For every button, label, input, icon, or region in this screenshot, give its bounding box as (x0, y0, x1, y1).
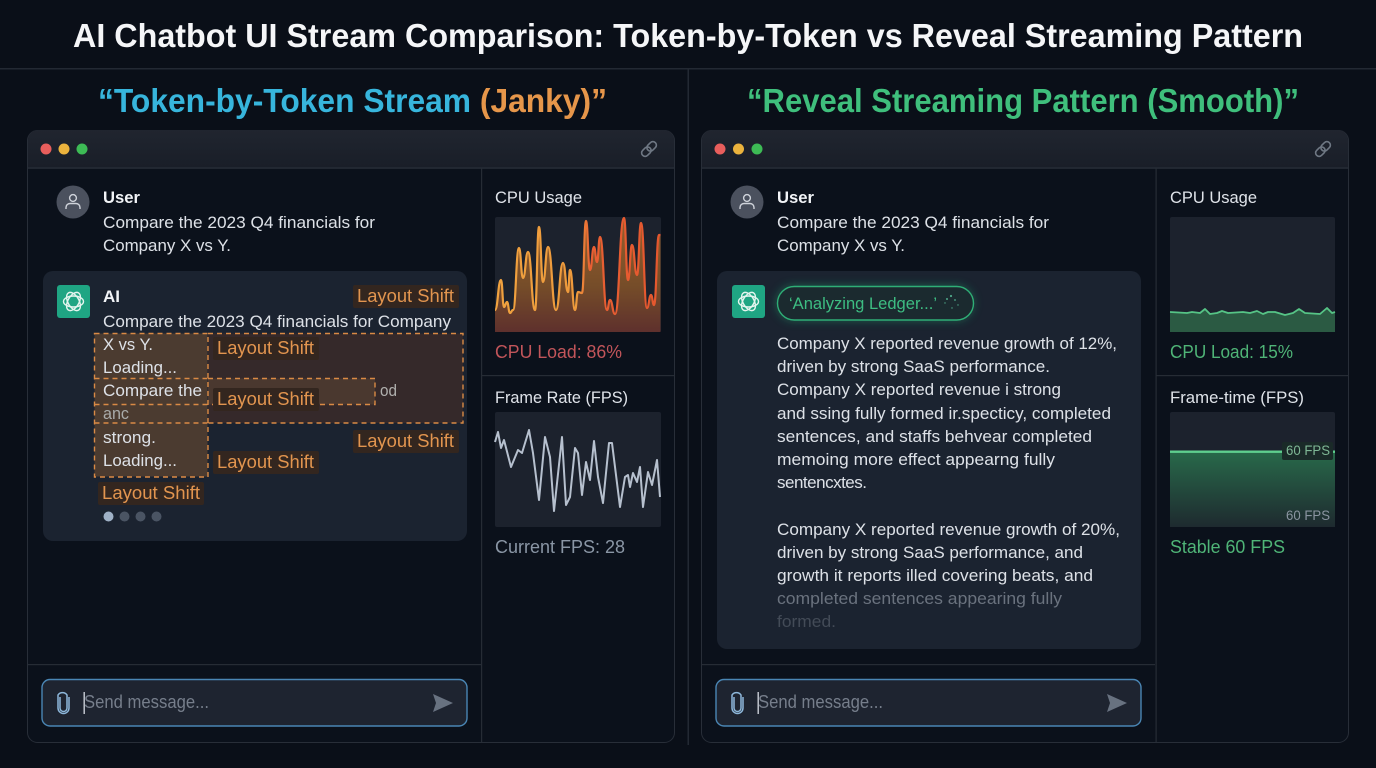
label: layout shift: Layout Shift (217, 338, 314, 358)
response paragraph one: Company X reported revenue growth of 12%, (777, 334, 1117, 353)
response paragraph two (777, 520, 1120, 631)
response paragraph one: memoing more effect appearng fully (777, 450, 1056, 469)
chart: CPU usage janky (495, 188, 661, 362)
heading: reveal streaming pattern: “Reveal Streaming Pattern (Smooth)” (747, 82, 1299, 119)
icon: user avatar (730, 186, 764, 218)
panel: AI message with layout shifts: AI (103, 287, 120, 306)
chart: frame rate janky (495, 388, 661, 557)
icon: send arrow (1107, 694, 1127, 712)
icon: link (640, 140, 658, 158)
response paragraph two: formed. (777, 612, 836, 631)
status pill: analyzing ledger: ‘Analyzing Ledger...’ (789, 294, 937, 313)
user message (730, 186, 1049, 255)
response paragraph one: driven by strong SaaS performance. (777, 357, 1050, 376)
panel: smooth window (702, 130, 1348, 742)
response paragraph two: growth it reports illed covering beats, and (777, 566, 1093, 585)
layout shift regions (94, 334, 463, 477)
label: layout shift: Layout Shift (217, 452, 314, 472)
icon: paperclip (732, 693, 743, 714)
user message: User (777, 188, 814, 207)
icon: link (1314, 140, 1332, 158)
heading: token-by-token stream: “Token-by-Token Stream (Janky)” (98, 82, 607, 119)
response paragraph one: and ssing fully formed ir.specticy, completed (777, 404, 1111, 423)
chart: CPU usage janky: CPU Load: 86% (495, 342, 622, 362)
panel: AI message with layout shifts: anc (103, 404, 129, 423)
chart: CPU usage smooth: CPU Load: 15% (1170, 342, 1293, 362)
message input: Send message... (758, 692, 883, 712)
panel: janky window (28, 130, 674, 742)
icon: send arrow (433, 694, 453, 712)
panel: AI message with layout shifts: strong. (103, 428, 156, 447)
user message: Compare the 2023 Q4 financials for (777, 213, 1049, 232)
label: layout shift: Layout Shift (357, 286, 454, 306)
response paragraph one: sentencxtes. (777, 473, 867, 492)
icon: AI logo (732, 285, 765, 318)
message input (716, 680, 1141, 726)
panel: AI message with layout shifts (43, 271, 467, 541)
label: layout shift: Layout Shift (217, 389, 314, 409)
panel: AI message with layout shifts: Loading... (103, 358, 177, 377)
user message: Company X vs Y. (103, 236, 231, 255)
user message: Company X vs Y. (777, 236, 905, 255)
response paragraph two: driven by strong SaaS performance, and (777, 543, 1083, 562)
label: 60 FPS upper: 60 FPS (1286, 442, 1330, 458)
icon: AI logo (57, 285, 90, 318)
chart: frame time smooth: Frame-time (FPS) (1170, 388, 1304, 407)
response paragraph one: sentences, and staffs behvear completed (777, 427, 1092, 446)
status pill: analyzing ledger (777, 286, 974, 320)
chart: frame time smooth (1170, 388, 1335, 557)
chart: CPU usage smooth (1170, 188, 1335, 362)
window controls (714, 144, 762, 154)
chart: frame time smooth: Stable 60 FPS (1170, 537, 1285, 557)
label: layout shift: Layout Shift (102, 483, 200, 503)
user message: Compare the 2023 Q4 financials for (103, 213, 375, 232)
response paragraph one (777, 334, 1117, 492)
label: layout shift: Layout Shift (357, 431, 454, 451)
icon: user avatar (56, 186, 90, 218)
panel: AI message with layout shifts: od (380, 381, 397, 400)
message input: Send message... (84, 692, 209, 712)
chart: frame time smooth: 60 FPS (1286, 507, 1330, 523)
panel: AI message with layout shifts: Loading... (103, 451, 177, 470)
message input (42, 680, 467, 726)
typing dots (104, 512, 162, 522)
window controls (40, 144, 88, 154)
panel: AI message revealed (717, 271, 1141, 649)
chart: frame rate janky: Current FPS: 28 (495, 537, 625, 557)
user message (56, 186, 375, 255)
response paragraph two: completed sentences appearing fully (777, 589, 1063, 608)
panel: AI message with layout shifts: X vs Y. (103, 335, 153, 354)
panel: AI message with layout shifts: Compare the 2023 Q4 financials for Company (103, 312, 451, 331)
title: AI Chatbot UI Stream Comparison: Token-by-Token vs Reveal Streaming Pattern (73, 17, 1303, 54)
response paragraph two: Company X reported revenue growth of 20%, (777, 520, 1120, 539)
chart: CPU usage smooth: CPU Usage (1170, 188, 1257, 207)
chart: frame rate janky: Frame Rate (FPS) (495, 388, 628, 407)
panel: AI message with layout shifts: Compare the (103, 381, 202, 400)
window title bar (28, 130, 674, 168)
window title bar (702, 130, 1348, 168)
user message: User (103, 188, 140, 207)
response paragraph one: Company X reported revenue i strong (777, 380, 1061, 399)
icon: paperclip (58, 693, 69, 714)
chart: CPU usage janky: CPU Usage (495, 188, 582, 207)
